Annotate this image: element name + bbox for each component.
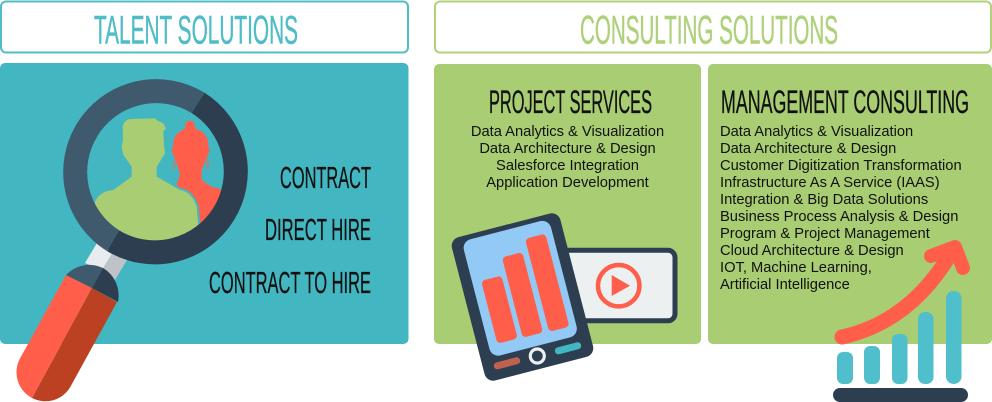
project services list <box>471 124 664 191</box>
talent solution list: CONTRACT <box>280 160 371 195</box>
management consulting list: Data Analytics & Visualization <box>720 124 913 140</box>
red person <box>172 120 222 224</box>
header: consulting solutions <box>435 2 991 52</box>
green person <box>90 118 200 247</box>
panel: management consulting <box>708 64 992 344</box>
management consulting list: Business Process Analysis & Design <box>720 209 958 225</box>
panel: project services <box>434 64 701 344</box>
management consulting list: Data Architecture & Design <box>720 141 896 157</box>
management consulting list: IOT, Machine Learning, <box>720 260 872 276</box>
magnifier neck <box>85 243 127 280</box>
project services list: Salesforce Integration <box>496 158 639 174</box>
management consulting list: Cloud Architecture & Design <box>720 243 904 259</box>
management consulting list: Infrastructure As A Service (IAAS) <box>720 175 940 191</box>
management consulting list: Artificial Intelligence <box>720 277 850 293</box>
heading: project services: PROJECT SERVICES <box>489 84 652 120</box>
icon: tablet with bar chart <box>450 211 595 383</box>
project services list: Application Development <box>486 175 649 191</box>
magnifier ring <box>75 91 236 252</box>
people silhouettes <box>94 118 222 240</box>
chart base <box>833 388 968 402</box>
icon: video player <box>530 250 675 321</box>
header: talent solutions <box>1 2 408 52</box>
panel: talent solutions <box>0 63 408 344</box>
management consulting list: Integration & Big Data Solutions <box>720 192 928 208</box>
talent solution list: CONTRACT TO HIRE <box>209 265 371 300</box>
talent solution list: DIRECT HIRE <box>265 212 371 247</box>
project services list: Data Analytics & Visualization <box>471 124 664 140</box>
icon: growth chart <box>833 247 968 402</box>
management consulting list: Customer Digitization Transformation <box>720 158 962 174</box>
management consulting list <box>720 124 962 293</box>
talent solution list <box>209 160 371 300</box>
growth arrow <box>842 247 963 337</box>
magnifier handle <box>16 265 119 401</box>
growth bars <box>837 291 962 384</box>
project services list: Data Architecture & Design <box>479 141 656 157</box>
icon: magnifying glass with people <box>16 91 236 401</box>
management consulting list: Program & Project Management <box>720 226 930 242</box>
header: talent solutions: TALENT SOLUTIONS <box>94 8 298 52</box>
